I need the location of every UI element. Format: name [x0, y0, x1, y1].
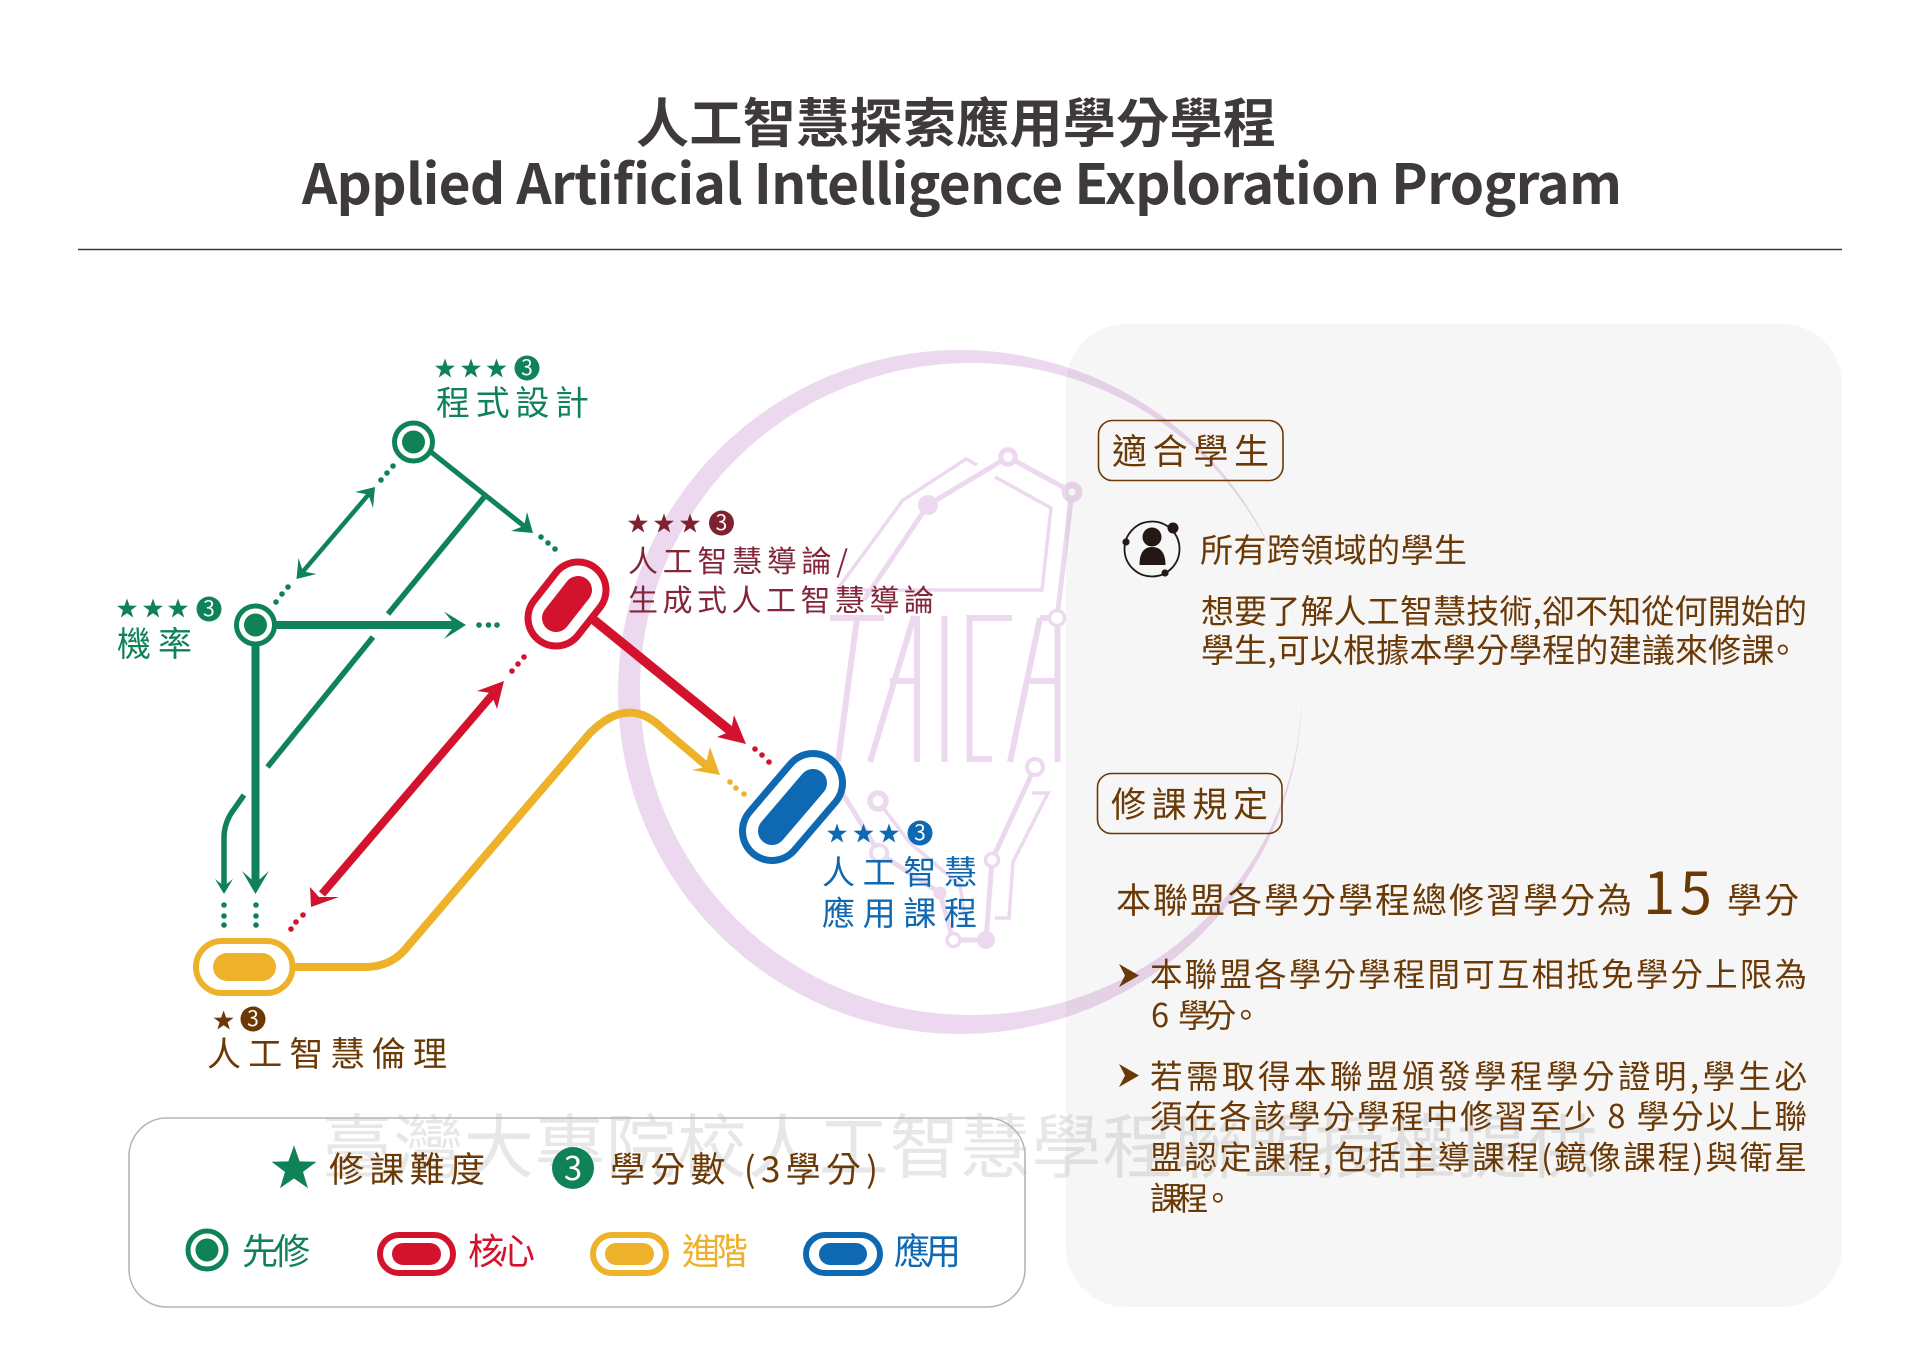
node: AI ethics: [196, 941, 447, 1076]
text: student description: [1201, 585, 1807, 672]
heading: suitable students: 適合學生: [1112, 424, 1269, 475]
arrow: programming to core: [431, 452, 558, 552]
rule: credit waiver: 本聯盟各學分學程間可互相抵免學分上限為: [1150, 949, 1807, 996]
node: AI introduction core: [556, 507, 934, 620]
legend: credit count: 3: [564, 1142, 582, 1190]
logo: TAICA watermark: [618, 350, 1302, 1034]
text: total credits: 本聯盟各學分學程總修習學分為: [1116, 873, 1632, 924]
legend: difficulty star: 修課難度: [329, 1142, 485, 1193]
arrow: probability to core: [276, 612, 500, 639]
legend: prerequisite: 先修: [242, 1223, 310, 1275]
arrow: ethics to applied: [292, 713, 747, 967]
rule: certificate: 若需取得本聯盟頒發學程學分證明,學生必: [1150, 1051, 1807, 1098]
arrow: programming to ethics branch: [215, 496, 485, 928]
node: programming: [394, 352, 589, 461]
panel: right background: [1066, 324, 1842, 1307]
node: AI ethics: 人工智慧倫理: [207, 1027, 447, 1076]
title: 人工智慧探索應用學分學程: [636, 82, 1276, 158]
rule: credit waiver: 6: [1151, 990, 1169, 1037]
rule: credit waiver: 學分。: [1178, 990, 1262, 1037]
icon: student: [1122, 522, 1180, 577]
heading: course rules: 修課規定: [1111, 777, 1268, 828]
legend: advanced: 進階: [682, 1223, 748, 1275]
rule: certificate: 須在各該學分學程中修習至少 8 學分以上聯: [1150, 1091, 1807, 1138]
text: all students: 所有跨領域的學生: [1200, 524, 1467, 572]
rule: certificate: 盟認定課程,包括主導課程(鏡像課程)與衛星: [1150, 1132, 1807, 1179]
node: probability: 機率: [117, 617, 192, 666]
arrow: core and ethics two-way: [288, 654, 527, 932]
legend: prerequisite: [188, 1223, 310, 1275]
node: probability: 3: [203, 593, 215, 623]
node: AI applied course: 3: [914, 817, 926, 847]
node: AI introduction core: 人工智慧導論/: [628, 537, 848, 581]
legend: core: 核心: [468, 1223, 535, 1275]
arrow: programming to probability two-way: [273, 463, 396, 605]
legend: applied: [806, 1223, 961, 1275]
panel: legend: [129, 1118, 1025, 1307]
node: AI applied course: 人工智慧: [822, 846, 977, 894]
node: AI applied course: [772, 783, 977, 935]
text: student description: 學生,可以根據本學分學程的建議來修課。: [1201, 624, 1791, 672]
node: AI introduction core: 3: [716, 507, 727, 537]
arrow: core to applied: [589, 616, 772, 765]
legend: advanced: [593, 1223, 748, 1275]
node: programming: 程式設計: [436, 376, 589, 425]
rule: certificate: [1119, 1051, 1807, 1220]
background watermark text: 臺灣大專院校人工智慧學程聯盟授權提供: [322, 1092, 1598, 1193]
legend: core: [380, 1223, 535, 1275]
text: total credits: 15: [1643, 847, 1712, 931]
legend: applied: 應用: [894, 1223, 961, 1275]
node: probability: [117, 593, 274, 666]
node: programming: 3: [521, 352, 533, 382]
node: AI applied course: 應用課程: [822, 887, 977, 935]
rule: credit waiver: [1119, 949, 1807, 1037]
title: [301, 82, 1622, 220]
arrow: probability to ethics: [242, 645, 269, 928]
node: AI ethics: 3: [247, 1003, 259, 1033]
node: AI introduction core: 生成式人工智慧導論: [628, 576, 934, 620]
text: total credits: [1116, 847, 1799, 931]
title: Applied Artificial Intelligence Exploration Program: [301, 140, 1622, 220]
text: total credits: 學分: [1727, 873, 1799, 924]
rule: certificate: 課程。: [1150, 1173, 1234, 1220]
text: student description: 想要了解人工智慧技術,卻不知從何開始的: [1201, 585, 1807, 633]
legend: credit count: 學分數 (3學分): [610, 1142, 878, 1193]
